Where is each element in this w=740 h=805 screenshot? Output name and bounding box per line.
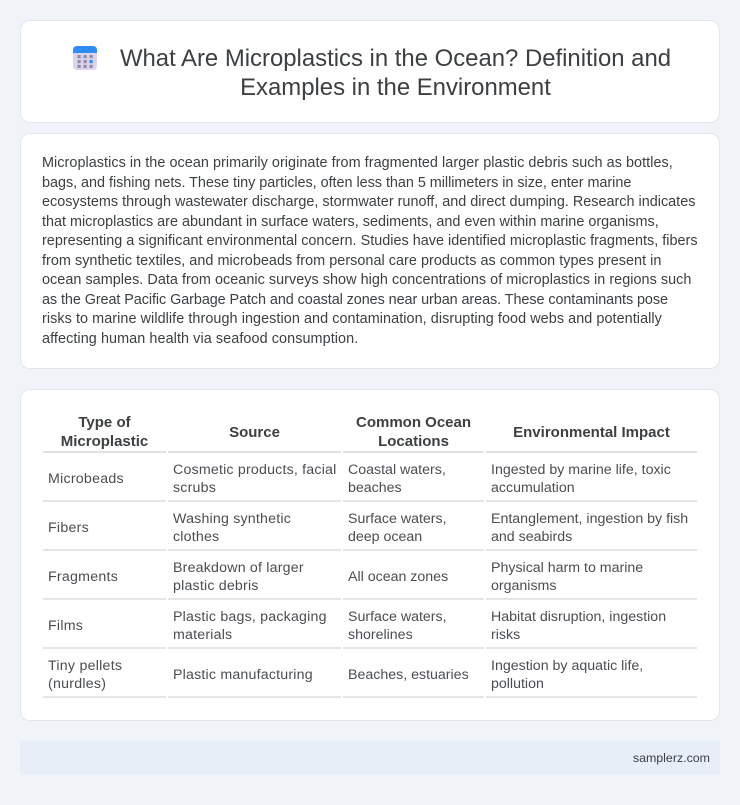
table: types of microplastic: deep ocean: [348, 528, 422, 544]
table: types of microplastic: All ocean zones: [348, 568, 448, 584]
table: types of microplastic: Environmental Impact: [513, 424, 670, 441]
table: types of microplastic: Habitat disruption, ingestion: [491, 608, 666, 624]
text block: introduction paragraph: as the Great Pacific Garbage Patch and coastal zones near urban areas. These contaminants pose: [42, 292, 668, 308]
table: types of microplastic: plastic debris: [173, 578, 259, 594]
table: types of microplastic: Entanglement, ingestion by fish: [491, 510, 688, 526]
text block: introduction paragraph: representing a significant environmental concern. Studies have identified microplastic fragments, fibers: [42, 233, 698, 249]
table: types of microplastic: Physical harm to marine: [491, 560, 643, 576]
panel: title card: [20, 20, 720, 123]
table: types of microplastic: Tiny pellets: [48, 658, 122, 674]
footer: source credit: [20, 741, 720, 775]
title: Examples in the Environment: [240, 74, 551, 101]
table: types of microplastic: Washing synthetic: [173, 510, 291, 526]
table: types of microplastic: Microplastic: [61, 432, 148, 450]
table: types of microplastic: Beaches, estuaries: [348, 666, 469, 682]
text block: introduction paragraph: from synthetic textiles, and microbeads from personal care products as common types present in: [42, 253, 661, 269]
table: types of microplastic: risks: [491, 626, 520, 642]
text block: introduction paragraph: affecting human health via seafood consumption.: [42, 331, 358, 347]
table: types of microplastic: Fibers: [48, 520, 89, 536]
table: types of microplastic: Breakdown of larger: [173, 560, 304, 576]
table: types of microplastic: Plastic bags, packaging: [173, 608, 327, 624]
table: types of microplastic: clothes: [173, 528, 219, 544]
text block: introduction paragraph: ecosystems through wastewater discharge, stormwater runoff, and direct dumping. Research indicates: [42, 194, 695, 210]
table: types of microplastic: Locations: [378, 432, 449, 450]
table: types of microplastic: (nurdles): [48, 676, 106, 692]
table: types of microplastic: Films: [48, 618, 83, 634]
text block: introduction paragraph: [42, 155, 698, 347]
table: types of microplastic: Coastal waters,: [348, 462, 446, 478]
table: types of microplastic: [43, 414, 697, 698]
table: types of microplastic: scrubs: [173, 480, 216, 496]
table: types of microplastic: organisms: [491, 578, 556, 594]
table: types of microplastic: pollution: [491, 676, 544, 692]
table: types of microplastic: Source: [229, 424, 280, 441]
table: types of microplastic: beaches: [348, 480, 402, 496]
table: types of microplastic: and seabirds: [491, 528, 572, 544]
table: types of microplastic: Ingested by marine life, toxic: [491, 462, 671, 478]
table: types of microplastic: Type of: [78, 414, 131, 430]
title: [120, 45, 671, 101]
table: types of microplastic: Fragments: [48, 568, 118, 584]
panel: introduction: [20, 133, 720, 369]
table: types of microplastic: Ingestion by aquatic life,: [491, 658, 643, 674]
text block: introduction paragraph: bags, and fishing nets. These tiny particles, often less than 5 millimeters in size, enter marine: [42, 175, 631, 191]
table: types of microplastic: Plastic manufacturing: [173, 666, 313, 682]
table: types of microplastic: Microbeads: [48, 470, 124, 486]
title: What Are Microplastics in the Ocean? Definition and: [120, 45, 671, 72]
panel: microplastics table: [20, 389, 720, 721]
table: types of microplastic: Surface waters,: [348, 608, 447, 624]
table: types of microplastic: shorelines: [348, 626, 413, 642]
text block: introduction paragraph: risks to marine wildlife through ingestion and contamination, disrupting food webs and potentially: [42, 311, 662, 327]
table: types of microplastic: Common Ocean: [356, 414, 471, 430]
table: types of microplastic: accumulation: [491, 480, 575, 496]
table: types of microplastic: Surface waters,: [348, 510, 447, 526]
text block: introduction paragraph: that microplastics are abundant in surface waters, sediments, and even within marine organisms,: [42, 214, 659, 230]
text block: introduction paragraph: ocean samples. Data from oceanic surveys show high concentrations of microplastics in regions such: [42, 272, 691, 288]
icon: calendar: [73, 46, 97, 70]
table: types of microplastic: materials: [173, 626, 232, 642]
table: types of microplastic: Cosmetic products, facial: [173, 462, 336, 478]
text block: introduction paragraph: Microplastics in the ocean primarily originate from fragmented larger plastic debris such as bottles,: [42, 155, 673, 171]
footer: source credit: samplerz.com: [633, 751, 710, 765]
